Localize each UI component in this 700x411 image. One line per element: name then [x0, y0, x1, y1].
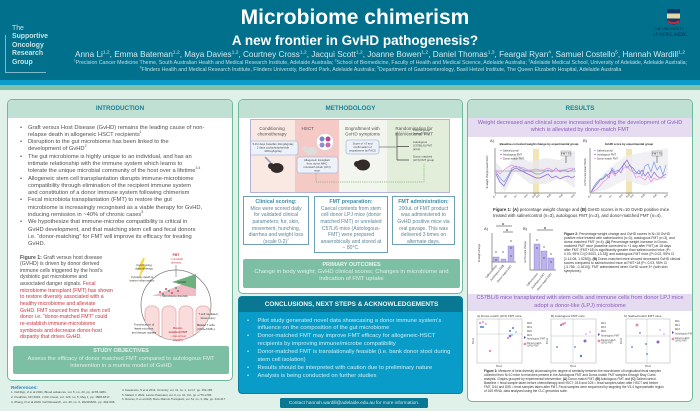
panel: conclusions: [238, 296, 463, 394]
diagram: GvHD gut schematic: chemotherapy: [135, 266, 153, 270]
callout: clinical scoring: [243, 196, 309, 245]
callout: clinical scoring: (scale 0-2)7: [263, 237, 289, 245]
text block: introduction bullets: The gut microbiome is highly unique to an individual, and has an: [28, 154, 192, 160]
affiliations: 1Precision Cancer Medicine Theme, South Australian Health and Medical Research Institute, Adelaide Australia; 2School of Biomedicine, Faculty of Health and Medical Science, Adelaide Australia; 3Adelaide Medical School, University of Adelaide, Adelaide Australia;: [74, 58, 687, 66]
text block: figure 1 caption: associated danger signals. Fecal: [20, 281, 96, 287]
line chart B: GvHD score: D0: [599, 194, 603, 199]
text block: conclusions bullets: recipients by improving immune/microbe compatibility: [258, 341, 396, 347]
diagram: GvHD gut schematic: GVHD: [178, 280, 187, 284]
diagram: GvHD gut schematic: tissue injury: [201, 316, 216, 320]
figure 2 caption: positive mice treated with saline/control (n=3), autologous FMT (n=3), and: [564, 236, 675, 240]
line chart B: GvHD score: Donor-match FMT: [597, 156, 618, 160]
text block: figure 1 caption: GvHD. FMT sourced from the stem cell: [20, 308, 110, 314]
banner: donor-like microbiome finding: adopt a donor-like (LPJ) microbiome: [534, 303, 626, 309]
banner: weight and clinical score finding: Weight decreased and clinical score increased following the development of GvHD: [478, 120, 682, 126]
text block: figure 1 caption: [20, 254, 113, 340]
affiliations: [74, 58, 687, 72]
text block: conclusions bullets: influence on the composition of the gut microbiome: [258, 325, 389, 331]
timeline artwork and labels: 2 days cyclophosphamide: [257, 146, 290, 150]
diagram: GvHD gut schematic: host microbes: [135, 326, 154, 330]
text block: introduction bullets: and constitution of a donor immune system following chimerism: [28, 190, 189, 196]
title: Microbiome chimerism: [241, 6, 469, 29]
callout: FMT preparation: matched FMT) or unrelated: [320, 219, 382, 225]
timeline artwork and labels: group: [413, 147, 421, 151]
scatter plot A: donor-match FMT: M20: [527, 330, 532, 333]
figure 3 caption: [484, 368, 664, 393]
diagram: GvHD gut schematic: disparity: [173, 338, 184, 342]
callout: study objectives: [13, 346, 229, 374]
logo: Supportive Oncology Research Group: Supportive: [12, 33, 48, 40]
callout: study objectives: STUDY OBJECTIVES: [93, 348, 149, 354]
text block: conclusions bullets: stem cell isolation): [258, 357, 306, 363]
text block: figure 1 caption: re-establish immune-microbiome: [20, 321, 95, 327]
diagram: GvHD gut schematic: ↑ microbial: [169, 257, 183, 261]
line chart A: weight change: % weight change (mean±SEM): [486, 155, 489, 188]
scatter plot A: donor-match FMT: M18: [527, 322, 532, 325]
line chart B: GvHD score: D-7: [588, 193, 593, 199]
text block: introduction bullets: Allogeneic stem cell transplantation disrupts immune-microbiome: [28, 176, 194, 182]
line chart A: weight change: D18: [532, 193, 537, 199]
banner: weight and clinical score finding: which is alleviated by donor-match FMT: [531, 127, 629, 133]
affiliations: 4Flinders Health and Medical Research Institute, Flinders University, Bedford Park, Adelaide Australia; 5Department of Gastroenterology, Basil Hetzel Institute, The Queen Elizabeth Hospital, Adelaide Australia: [140, 65, 621, 72]
line chart B: GvHD score: GvHD score by experimental group: [605, 142, 653, 146]
scatter plot B: autologous FMT: M15: [601, 326, 606, 329]
timeline artwork and labels: (saline FMT): [413, 132, 429, 136]
header stripe: green: [0, 85, 700, 90]
bar chart B: GvHD score change: Saline/control: [525, 272, 539, 287]
bar chart B: GvHD score change: B): [523, 226, 528, 231]
text block: conclusions bullets: Donor-matched FMT may improve FMT efficacy for allogeneic-HSCT: [258, 333, 435, 339]
diagram: GvHD gut schematic: diversity: [171, 260, 182, 264]
scatter plot C: saline control: PCo2: [621, 337, 623, 344]
text block: introduction bullets: microbiome is increasingly recognised as a viable therapy for GvHD,: [28, 205, 202, 211]
scatter plot A: donor-match FMT: PCo1: [496, 366, 503, 368]
callout: clinical scoring: parameters; fur, skin,: [252, 219, 300, 225]
text block: figure 1 caption: disparity that drives GvHD.: [20, 334, 82, 340]
line chart A: weight change: D14: [524, 193, 529, 199]
diagram: GvHD gut schematic: Donor-: [173, 326, 183, 330]
line chart B: GvHD score: D35: [653, 193, 658, 199]
bar chart A: weight increase: Donor-match FMT: [496, 264, 513, 283]
contact bar: [280, 398, 428, 408]
figure 2 caption: [-3.756, -0.1610]). FMT administered when GvHD score 3+ (with skin: [564, 265, 668, 269]
timeline artwork and labels: HSCT: [301, 126, 314, 131]
line chart B: GvHD score: D18: [626, 193, 631, 199]
line chart B: GvHD score: GvHD score (mean±SEM): [584, 158, 587, 186]
callout: clinical scoring: diarrhea and weight loss: [249, 232, 303, 238]
text block: figure 1 caption: microbiome transplant (FMT) has shown: [20, 288, 113, 294]
callout: FMT preparation: FMT preparation:: [329, 198, 373, 204]
callout: FMT administration: FMT administration:: [398, 198, 449, 204]
line chart B: GvHD score: B): [583, 138, 588, 143]
scatter plot C: saline control: Autologous FMT: [675, 332, 693, 336]
callout: clinical scoring: movement, hunching,: [252, 226, 300, 232]
scatter plot C: saline control: Donor-match: [675, 337, 690, 340]
line chart B: GvHD score: D21: [630, 193, 635, 199]
scatter plot B: autologous FMT: Autologous FMT: [601, 334, 620, 338]
line chart A: weight change: Baseline-corrected weight change by experimental group: [500, 142, 579, 146]
diagram: GvHD gut schematic: matched FMT: [169, 330, 188, 334]
panel: introduction: [7, 99, 233, 381]
scatter plot B: autologous FMT: Donor-match: [601, 339, 616, 342]
timeline artwork and labels: from donor MHC: [307, 162, 327, 166]
text block: introduction bullets: Fecal microbiota transplantation (FMT) to restore the gut: [28, 197, 172, 203]
references left column: 2. Fredricks, DN 2019, J Clin Invest, vol. 129, no. 5, May 1, pp. 1808-1817.: [11, 395, 110, 399]
heading: methodology: [239, 100, 462, 118]
timeline band: HSCT: [295, 120, 339, 194]
line chart B: GvHD score: D28: [641, 193, 646, 199]
bar chart A: weight increase: A): [484, 226, 489, 231]
line chart A: weight change: D42: [571, 193, 576, 199]
timeline artwork and labels: confirmation of: [353, 145, 372, 149]
callout: FMT preparation: Caecal contents from stem: [321, 206, 381, 212]
timeline band: engraftment: [339, 120, 387, 194]
figure 2 caption: [564, 232, 680, 273]
timeline artwork and labels: engraftment by FACS: [349, 148, 376, 152]
bar chart A: weight increase: Saline/control: [484, 264, 498, 279]
authors: Anna Li1,2, Emma Bateman1,2, Maya Davies1,2, Courtney Cross1,2, Jacqui Scott1,2, Joanne Bowen1,2, Daniel Thomas1,3, Feargal Ryan4, Samuel Costello5, Hannah Wardill1,2: [75, 50, 685, 59]
timeline artwork and labels: 5-FU days busulfan 20mg/kg/day: [252, 142, 294, 146]
logo: Supportive Oncology Research Group: The: [12, 25, 24, 32]
heading: conclusions: CONCLUSIONS, NEXT STEPS & ACKNOWLEDGEMENTS: [265, 301, 438, 308]
line chart B: GvHD score: Autologous FMT: [597, 152, 616, 156]
timeline artwork and labels: [251, 126, 435, 182]
figure 1 caption: Figure 1: (A) percentage weight change and (B) GvHD scores in N=10 GvHD positive mice: [493, 207, 669, 212]
logo: Supportive Oncology Research Group: Group: [12, 59, 33, 66]
figure 3 caption: of 16S rRNA, data analysed using the CLC genomics suite.: [484, 389, 568, 393]
callout: study objectives: intervention in a murine model of GvHD: [70, 363, 172, 369]
text block: introduction bullets: tolerate the unique microbial community of the host over a lifetime3,4: [28, 166, 200, 174]
line chart A: weight change: Donor-match FMT: [503, 156, 524, 160]
callout: clinical scoring: Mice were scored daily: [250, 206, 302, 212]
scatter plot C: saline control: C) Saline/control FMT mice: [624, 314, 662, 318]
references left column: [11, 390, 115, 404]
timeline artwork and labels: Score of >3 and: [353, 142, 373, 146]
scatter plot A: donor-match FMT: A) Donor-match (LPJ) FMT mice: [477, 314, 522, 318]
timeline artwork and labels: Control group: [413, 128, 430, 132]
panel: results: [467, 99, 693, 402]
figure 2 caption: after FMT (FMT+18) is significantly greater than saline/control mice (P=: [564, 248, 671, 252]
text block: introduction bullets: relapse death in allogeneic HSCT recipients1: [28, 130, 142, 138]
text block: conclusions bullets: Pilot study generated novel data showcasing a donor immune system’s: [258, 318, 441, 324]
scatter plot B: autologous FMT: PCo1: [570, 366, 577, 368]
logo: University of Adelaide: THE UNIVERSITY: [654, 26, 684, 30]
text block: conclusions bullets: Results should be interpreted with caution due to preliminary nature: [258, 365, 432, 371]
text block: introduction bullets: GvHD.: [28, 241, 45, 247]
line chart A: weight change: D-7: [493, 193, 498, 199]
heading: methodology: METHODOLOGY: [325, 105, 376, 112]
line chart A: weight change: Saline/control: [503, 148, 519, 152]
contact bar: Contact hannah.wardill@adelaide.edu.au for more information.: [289, 400, 419, 405]
timeline artwork and labels: mismatch strain (LPJ): [303, 165, 331, 169]
diagram: GvHD gut schematic: FMT: [173, 253, 179, 257]
scatter plot C: saline control: PCo1: [645, 366, 652, 368]
line chart A: weight change: A): [490, 138, 495, 143]
timeline artwork and labels: (LPJ) FMT group: [413, 158, 435, 162]
figure 2 caption: [1.14.08, 1.5283]). (B) Donor-matched mice showed decreased GvHD clinical: [564, 257, 680, 261]
diagram: GvHD gut schematic: T-cell mediated: [199, 312, 218, 316]
text block: introduction bullets: [20, 124, 204, 247]
text block: figure 1 caption: Figure 1: Graft versus host disease: [20, 254, 102, 260]
callout: FMT administration: oral gavage. This was: [399, 226, 448, 232]
text block: introduction bullets: development of GvHD2: [28, 144, 86, 152]
callout: FMT administration: GvHD positive mice via: [397, 219, 450, 225]
diagram: experimental timeline: [250, 119, 450, 193]
header stripe: blue: [0, 80, 700, 85]
bar chart B: GvHD score change: Donor-match FMT: [536, 272, 553, 291]
scatter plot A: donor-match FMT: (LPJ) FMT: [527, 344, 539, 348]
callout: FMT preparation: − 80°C.: [342, 245, 360, 251]
text block: introduction bullets: i.e. “donor-matching” for FMT will improve its efficacy for treating: [28, 234, 192, 240]
text block: conclusions bullets: Analysis is being conducted on further studies: [258, 373, 376, 379]
line chart A: weight change: Autologous FMT: [503, 152, 522, 156]
timeline artwork and labels: GvHD symptoms: [345, 132, 381, 136]
scatter plot A: donor-match FMT: M19: [527, 326, 532, 329]
references right column: 5. Malard, F 2022, Lancet Haematol, vol. 9, no. 10, Oct, pp. e776-e785.: [122, 393, 212, 397]
references: [11, 384, 226, 404]
diagram: GvHD gut schematic: Cytotoxic death &: [131, 275, 153, 279]
text block: introduction bullets: GvHD development, and that matching stem cell and fecal donors: [28, 227, 195, 233]
timeline artwork and labels: chemotherapy: [257, 132, 287, 136]
text block: introduction bullets: Graft versus Host Disease (GvHD) remains the leading cause of non-: [28, 124, 204, 130]
figure 3 caption: analysis. Graphs grouped by experimental intervention: (A) Donor-match FMT, (B) Autologous FMT and (C) Saline/control.: [484, 377, 657, 381]
callout: clinical scoring: Clinical scoring:: [255, 198, 297, 204]
banner: donor-like microbiome finding: [467, 294, 693, 311]
diagram: GvHD gut schematic: [130, 253, 218, 342]
callout: FMT preparation: cell donor LPJ mice (donor: [321, 212, 381, 218]
callout: FMT preparation: [314, 196, 388, 253]
scatter plot B: autologous FMT: B) Autologous FMT mice: [551, 314, 585, 318]
diagram: GvHD gut schematic: Conditioning: [136, 263, 152, 267]
diagram: GvHD gut schematic: (CD4+/CD8+): [197, 327, 215, 331]
scatter plot A: donor-match FMT: PCo2: [473, 337, 475, 344]
figure 2 caption: scores compared to saline/control mice at FMT+18 (P= 0.03, 95% CI: [564, 261, 667, 265]
callout: FMT administration: 200uL of FMT product: [399, 206, 448, 212]
line chart B: GvHD score: D14: [619, 193, 624, 199]
line chart A: weight change: D28: [547, 193, 552, 199]
text block: figure 1 caption: donor i.e. “donor-matched FMT” could: [20, 314, 107, 320]
references right column: [122, 388, 226, 401]
text block: figure 1 caption: immune cells triggered by the host’s: [20, 268, 103, 274]
figure 2 caption: matched FMT mice (baseline corrected to +1 day after FMT) at 18 days: [564, 244, 671, 248]
heading: conclusions: [239, 297, 464, 312]
line chart A: weight change: D35: [559, 193, 564, 199]
timeline band: randomisation: [387, 120, 451, 194]
timeline artwork and labels: Allogeneic transplant: [304, 158, 330, 162]
scatter plot B: autologous FMT: M16: [601, 330, 606, 333]
diagram: GvHD gut schematic: Donor T cells: [197, 323, 215, 327]
figure 1 caption: treated with saline/control (n=3), autologous FMT (n=3), and donor-matched FMT (n=4).: [493, 213, 662, 218]
text block: figure 1 caption: dysbiotic gut microbiome and: [20, 274, 87, 280]
text block: introduction bullets: inducing remission in ~40% of chronic cases5: [28, 210, 143, 218]
callout: primary outcomes: indication of FMT uptake: [319, 276, 384, 282]
scatter plot C: saline control: (LPJ) FMT: [675, 340, 687, 342]
diagram: GvHD gut schematic: barrier inflammation: [130, 278, 155, 282]
logo: Supportive Oncology Research Group: Oncology: [12, 42, 44, 49]
callout: primary outcomes: PRIMARY OUTCOMES: [322, 262, 381, 268]
bar chart B: GvHD score change: Autologous FMT: [530, 272, 546, 290]
figure 3 caption: Baseline = fecal sample taken before chemotherapy and HSCT, D15 and D25 = fecal samples taken after HSCT and before: [484, 381, 658, 385]
references right column: 6. Rowner, K et al 2015, Bone Marrow Transplant, vol. 51, no. 3, Mar, pp. 410-417.: [122, 397, 226, 401]
line chart A: weight change: D7: [514, 194, 518, 199]
heading: introduction: [8, 100, 232, 118]
text block: conclusions bullets: Donor-matched FMT is translationally feasible (i.e. bank donor stool during: [258, 349, 450, 355]
text block: figure 1 caption: symbiosis and decrease donor-host: [20, 328, 102, 334]
timeline artwork and labels: Engraftment with: [345, 126, 380, 131]
figure 3 caption: collected from N=10 mice to microbes present in the Autologous FMT and Donor-match FMT samples through Bray Curtis: [484, 373, 656, 377]
scatter plot B: autologous FMT: PCo2: [547, 337, 549, 344]
references right column: 4. Kawamoto, S et al 2014, Immunity, vol. 41, no. 1, Jul 17, pp. 152-165.: [122, 388, 213, 392]
references left column: 3. Zheng, D et al 2020, Cell Research, vol. 30, no. 6, 2020/06/01, pp. 492-506.: [11, 400, 115, 404]
line chart B: GvHD score: Saline/control: [597, 148, 613, 152]
banner: weight and clinical score finding: [468, 118, 692, 137]
text block: introduction bullets: We hypothesize that immune-microbe compatibility is critical in: [28, 219, 187, 225]
line chart B: GvHD score: FMT T0: [652, 152, 662, 156]
text block: conclusions bullets: [247, 318, 450, 379]
heading: results: [468, 100, 692, 118]
scatter plot C: saline control: M13: [675, 328, 680, 331]
references left column: 1. DeFilipp, Z et al 2021, Blood advances, vol. 5, no. 20, pp. 4278-4284.: [11, 390, 107, 394]
line chart A: weight change: FMT T0: [561, 152, 571, 156]
timeline artwork and labels: Autologous: [413, 140, 428, 144]
header banner: [0, 0, 700, 90]
banner: donor-like microbiome finding: C57BL/6 mice transplanted with stem cells and immune cells from donor LPJ mice: [476, 295, 684, 301]
scatter plot C: saline control: M11: [675, 320, 680, 323]
text block: figure 1 caption: (GVHD) is driven by donor derived: [20, 261, 99, 267]
callout: FMT preparation: C57L/6 mice (Autologous-: [322, 226, 380, 232]
bar chart B: GvHD score change: GvHD score change: [524, 241, 527, 263]
heading: results: RESULTS: [566, 105, 594, 112]
references heading: References:: [11, 384, 38, 390]
logo: Supportive Oncology Research Group: Research: [12, 50, 43, 57]
callout: FMT preparation: anaerobically and stored at: [321, 239, 381, 245]
subtitle: A new frontier in GvHD pathogenesis?: [232, 33, 478, 48]
heading: introduction: INTRODUCTION: [96, 105, 144, 112]
text block: figure 1 caption: healthy microbiome and alleviate: [20, 301, 96, 307]
callout: FMT administration: alternate days.: [407, 239, 440, 245]
panel: methodology: [238, 99, 463, 294]
timeline artwork and labels: Randomisation for: [395, 126, 433, 131]
figure 2 caption: 0.03, 95% CI [0.5003, 13.33]) and autologous FMT mice (P=0.02, 95% CI: [564, 252, 674, 256]
callout: study objectives: Assess the efficacy of donor matched FMT compared to autologous FMT: [28, 356, 214, 362]
scatter plot A: donor-match FMT: Autologous FMT: [527, 338, 546, 340]
bar chart A: weight increase: Autologous FMT: [489, 264, 505, 282]
scatter plot A: donor-match FMT: M21: [527, 334, 532, 337]
diagram: GvHD gut schematic: Translocation of: [134, 322, 154, 326]
line chart B: GvHD score: D7: [609, 194, 613, 199]
figure 2 caption: symptoms).: [564, 269, 582, 273]
scatter plot B: autologous FMT: (LPJ) FMT: [601, 342, 613, 344]
timeline artwork and labels: mice: [314, 168, 320, 172]
callout: primary outcomes: [243, 259, 460, 288]
callout: FMT administration: delivered 3 times on: [401, 232, 446, 238]
diagram: GvHD gut schematic: ↓ donor-host: [170, 334, 186, 338]
scatter plot C: saline control: M12: [675, 324, 680, 327]
figure 2 caption: donor-matched FMT (n=4). (A) Percentage weight increase in Donor-: [564, 240, 668, 244]
timeline artwork and labels: Donor matched: [413, 154, 433, 158]
line chart A: weight change: D0: [504, 194, 508, 199]
timeline artwork and labels: 100mg/kg/day: [264, 149, 282, 153]
callout: FMT administration: was administered to: [401, 212, 446, 218]
figure 3 caption: Figure 3: Measure of beta diversity showcasing the degree of similarity between the microbiome of longitudinal fecal samples: [484, 368, 661, 372]
diagram: GvHD gut schematic: ↓ Microbiome diversity: [160, 294, 188, 298]
figure 2 caption: Figure 2: Percentage weight change and GvHD scores in N=10 GvHD: [564, 232, 670, 236]
callout: FMT administration: [392, 196, 455, 245]
callout: clinical scoring: for validated clinical: [254, 212, 298, 218]
logo: University of Adelaide: [653, 9, 686, 38]
logo: University of Adelaide: of ADELAIDE: [653, 32, 686, 38]
scatter plot B: autologous FMT: M14: [601, 322, 606, 325]
diagram: GvHD gut schematic: and danger signals: [132, 330, 157, 334]
scatter plot A: donor-match FMT: Donor-match: [527, 342, 542, 345]
text block: introduction bullets: intimate relationship with the immune system which learns to: [28, 161, 182, 167]
logo: Supportive Oncology Research Group: [5, 24, 48, 73]
figure 1 caption: [493, 207, 669, 218]
timeline artwork and labels: Conditioning: [259, 126, 285, 131]
text block: introduction bullets: compatibility through elimination of the recipient immune system: [28, 183, 191, 189]
text block: figure 1 caption: to restore diversity associated with a: [20, 294, 104, 300]
timeline artwork and labels: interventional FMT: [395, 132, 433, 136]
callout: FMT preparation: FMT) were prepared: [328, 232, 374, 238]
text block: introduction bullets: Disruption to the gut microbiome has been linked to the: [28, 139, 169, 145]
bar chart A: weight increase: % weight change: [478, 243, 481, 262]
line chart A: weight change: D21: [536, 193, 541, 199]
line chart B: GvHD score: D42: [664, 193, 669, 199]
callout: primary outcomes: Change in body weight; GvHD clinical scores; Changes in microbiome and: [254, 269, 449, 275]
timeline artwork and labels: (C57BL/6) FMT: [413, 144, 433, 148]
figure 3 caption: FMT, D44 and D55 = fecal samples taken after FMT. Fecal samples were sequenced by targeting the V3-4 hypervariable region: [484, 385, 664, 389]
